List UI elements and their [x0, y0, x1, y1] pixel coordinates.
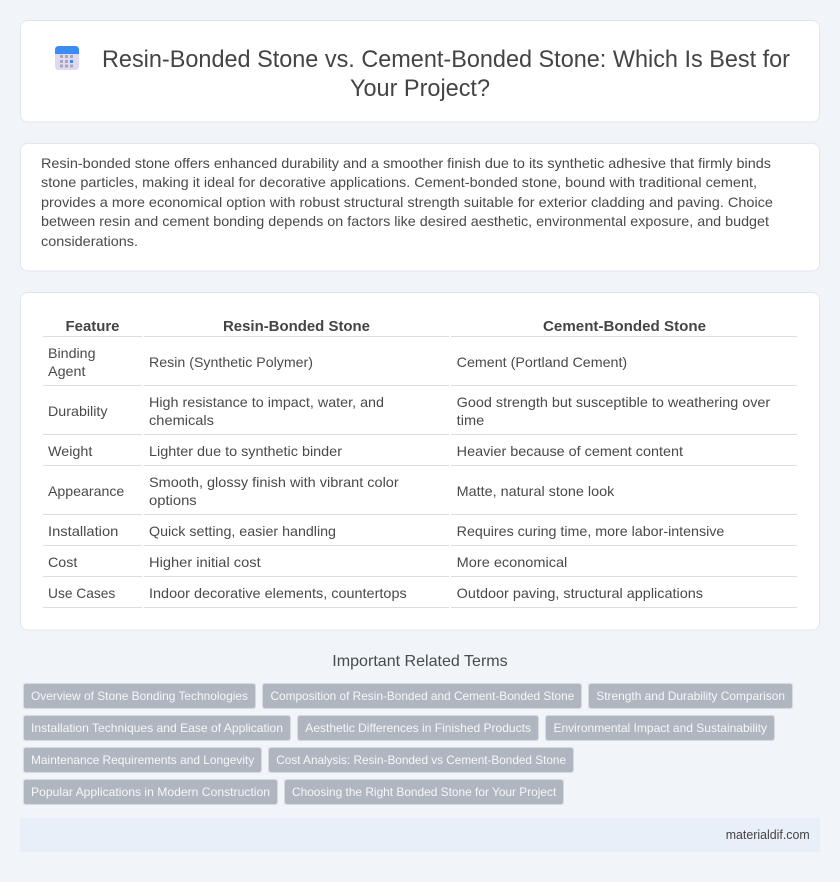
chip — [588, 684, 792, 708]
row: weight — [48, 443, 683, 459]
row: appearance: options — [149, 492, 197, 508]
chip: Overview of Stone Bonding Technologies — [31, 689, 248, 703]
chip: Maintenance Requirements and Longevity — [31, 753, 254, 767]
heading: important related terms: Important Related Terms — [332, 653, 508, 670]
row: binding agent: Resin (Synthetic Polymer) — [149, 354, 313, 370]
title: Your Project? — [350, 75, 490, 102]
panel: comparison table — [20, 292, 820, 630]
chip — [24, 684, 256, 708]
row: binding agent: Agent — [48, 363, 86, 379]
row: cost — [48, 554, 567, 570]
intro text block: provides a more economical option with robust structural strength suitable for exterior cladding and paving. Choice — [41, 194, 773, 210]
row: installation: Quick setting, easier handling — [149, 523, 336, 539]
row: durability: chemicals — [149, 412, 214, 428]
row: use cases: Indoor decorative elements, countertops — [149, 585, 407, 601]
chip — [24, 780, 278, 804]
row: weight: Weight — [48, 443, 92, 459]
chip: Installation Techniques and Ease of Application — [31, 721, 283, 735]
intro text block: Resin-bonded stone offers enhanced durability and a smoother finish due to its synthetic adhesive that firmly binds — [41, 155, 771, 171]
row: durability: Durability — [48, 403, 108, 419]
row: cost: More economical — [457, 554, 567, 570]
row: durability: Good strength but susceptible to weathering over — [457, 394, 771, 410]
panel: introduction — [20, 144, 820, 271]
panel: header — [20, 20, 820, 122]
table header row: Resin-Bonded Stone — [223, 319, 370, 335]
row: installation: Installation — [48, 523, 118, 539]
chip: Cost Analysis: Resin-Bonded vs Cement-Bonded Stone — [276, 753, 566, 767]
row: binding agent: Binding — [48, 345, 96, 361]
title — [102, 46, 790, 102]
row: binding agent: Cement (Portland Cement) — [457, 354, 627, 370]
chip: Popular Applications in Modern Construction — [31, 785, 270, 799]
chip: Environmental Impact and Sustainability — [554, 721, 767, 735]
row: weight: Lighter due to synthetic binder — [149, 443, 342, 459]
chip — [284, 780, 564, 804]
chip — [298, 716, 538, 740]
intro text block — [41, 155, 773, 249]
intro text block: between resin and cement bonding depends on factors like desired aesthetic, environmental exposure, and budget — [41, 213, 769, 229]
related terms chips — [24, 684, 792, 804]
intro text block: considerations. — [41, 233, 138, 249]
chip — [24, 748, 262, 772]
row: cost: Cost — [48, 554, 77, 570]
row: installation: Requires curing time, more labor-intensive — [457, 523, 725, 539]
chip — [546, 716, 774, 740]
row: weight: Heavier because of cement content — [457, 443, 683, 459]
row: use cases — [48, 585, 703, 601]
row: use cases: Outdoor paving, structural applications — [457, 585, 703, 601]
row: cost: Higher initial cost — [149, 554, 261, 570]
icon: calendar — [55, 46, 79, 70]
chip — [268, 748, 574, 772]
intro text block: stone particles, making it ideal for decorative applications. Cement-bonded stone, bound with traditional cement, — [41, 174, 757, 190]
chip: Aesthetic Differences in Finished Products — [305, 721, 531, 735]
table header row: Feature — [66, 319, 120, 335]
row: appearance: Smooth, glossy finish with vibrant color — [149, 474, 399, 490]
footer: materialdif.com — [726, 828, 810, 842]
row: appearance: Appearance — [48, 483, 125, 499]
row: durability — [48, 394, 771, 428]
row: durability: High resistance to impact, water, and — [149, 394, 384, 410]
row: installation — [48, 523, 725, 539]
chip — [24, 716, 290, 740]
chip — [262, 684, 582, 708]
table header row — [66, 319, 706, 335]
chip: Composition of Resin-Bonded and Cement-Bonded Stone — [270, 689, 575, 703]
chip: Choosing the Right Bonded Stone for Your Project — [292, 785, 557, 799]
table rules — [43, 336, 797, 608]
table header row: Cement-Bonded Stone — [543, 319, 706, 335]
title: Resin-Bonded Stone vs. Cement-Bonded Stone: Which Is Best for — [102, 46, 790, 73]
row: use cases: Use Cases — [48, 585, 115, 601]
row: appearance — [48, 474, 615, 508]
row: appearance: Matte, natural stone look — [457, 483, 615, 499]
row: durability: time — [457, 412, 484, 428]
chip: Strength and Durability Comparison — [596, 689, 785, 703]
footer — [20, 818, 820, 852]
row: binding agent — [48, 345, 627, 379]
